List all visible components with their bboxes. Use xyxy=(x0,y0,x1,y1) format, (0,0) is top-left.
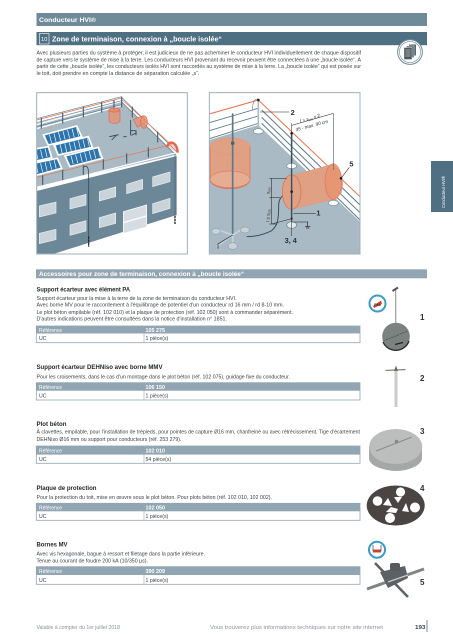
product: plot béton: DEHNiso Ø16 mm ou support pour conducteurs (réf. 253 279). xyxy=(36,437,182,443)
table: 102 050: 102 050 xyxy=(146,506,165,512)
icon: PA badge xyxy=(370,296,386,312)
table: 390 209: 390 209 xyxy=(146,569,165,575)
footer xyxy=(36,620,427,632)
intro text block: Avec plusieurs parties du système à protéger, il est judicieux de ne pas acheminer le conducteur HVI individuellement de chaque dispositif xyxy=(36,50,362,56)
table: 105 275: 1 pièce(s) xyxy=(146,336,169,342)
side tab xyxy=(431,161,453,212)
illustration: building roof overview xyxy=(33,93,187,254)
section heading: zone de terminaison: 10 xyxy=(41,37,47,43)
dimension labels: 35 - max. 90 cm xyxy=(295,119,329,132)
isolation zones xyxy=(109,108,178,153)
railings xyxy=(209,99,360,220)
table: 390 209 xyxy=(36,567,360,584)
product: plaque de protection: Pour la protection du toit, mise en œuvre sous le plot béton. Pour plots béton (réf. 102 010, 102 002). xyxy=(36,495,272,501)
product: plaque de protection xyxy=(36,485,360,520)
callout numbers: 1 xyxy=(316,208,320,217)
product: bornes MV: Bornes MV xyxy=(36,542,68,549)
callout numbers xyxy=(285,108,353,245)
right cylinder xyxy=(282,164,343,209)
table: 102 050: 1 pièce(s) xyxy=(146,514,169,520)
photo 4: protection plate xyxy=(367,486,425,526)
table: 102 010: 102 010 xyxy=(146,448,165,454)
intro text block: partir de cette „boucle isolée“, les conducteurs isolés HVI sont raccordés au système de mise à la terre. La „boucle isolée“ qui est posée sur xyxy=(36,64,361,70)
footer: Valable à compter du 1er juillet 2018 xyxy=(36,625,120,631)
dimension labels: s xyxy=(265,192,270,194)
dimension labels: x 2 xyxy=(312,113,321,120)
callout numbers: 2 xyxy=(291,108,295,117)
table: 106 150: 106 150 xyxy=(146,385,165,391)
table: 106 150: Référence xyxy=(39,385,62,391)
down conductors xyxy=(83,155,175,247)
table: 105 275: Référence xyxy=(39,328,62,334)
table: 102 050: UC xyxy=(39,514,47,520)
product: support écarteur avec élément PA: Le plot béton empilable (réf. 102 010) et la plaque de protection (réf. 102 050) sont à commander séparément. xyxy=(36,310,293,316)
accessories heading bar: Accessoires pour zone de terminaison, connexion à „boucle isolée“ xyxy=(39,271,244,278)
icon: PA badge: PAs xyxy=(374,303,381,307)
dimension labels xyxy=(265,113,329,222)
table: 390 209: Référence xyxy=(39,569,62,575)
footer: Vous trouverez plus informations techniques sur notre site internet xyxy=(210,625,384,631)
product: bornes MV: Avec vis hexagonale, bague à ressort et filetage dans la partie inférieure. xyxy=(36,552,205,558)
number 2: 2 xyxy=(420,374,425,383)
table: 106 150: UC xyxy=(39,393,47,399)
photo 2: support DEHNiso xyxy=(386,366,406,407)
right mast xyxy=(272,113,342,236)
product: support écarteur avec élément PA xyxy=(36,287,360,343)
dimension lines xyxy=(269,113,349,224)
product: bornes MV: Tenue au courant de foudre 200 kA (10/350 µs). xyxy=(36,559,148,565)
dimension labels: iso xyxy=(267,209,271,213)
product: support écarteur avec élément PA: Support écarteur pour la mise à la terre de la zone de terminaison du conducteur HVI. xyxy=(36,296,236,302)
callout numbers: 3, 4 xyxy=(285,236,298,245)
table: 102 010: 54 pièce(s) xyxy=(146,457,171,463)
number 5: 5 xyxy=(420,578,425,587)
orange loop and front poles xyxy=(37,145,170,185)
section heading: zone de terminaison: Zone de terminaison, connexion à „boucle isolée“ xyxy=(52,36,222,44)
section heading: zone de terminaison xyxy=(36,32,427,45)
table: 102 050 xyxy=(36,503,360,520)
dimension labels: iso xyxy=(267,187,271,192)
left cylinder xyxy=(210,138,250,189)
product: support écarteur avec élément PA: Avec borne MV pour le raccordement à l'équilibrage de potentiel d'un conducteur rd 16 mm / rd 8-10 mm. xyxy=(36,303,284,309)
solar panels xyxy=(33,126,102,176)
product: support écarteur DEHNiso: Support écarteur DEHNiso avec borne MMV xyxy=(36,364,163,371)
illustration: detail of isolated ring with dimensions xyxy=(209,93,360,254)
callout numbers: 5 xyxy=(349,159,353,168)
table: 102 010: Référence xyxy=(39,448,62,454)
table: 102 050: Référence xyxy=(39,506,62,512)
number 1: 1 xyxy=(420,313,425,322)
accessories heading bar xyxy=(36,269,427,278)
product: support écarteur DEHNiso: Pour les croisements, dans le cas d'un montage dans le plot béton (réf. 102 075), guidage fixe du conducteur. xyxy=(36,375,290,381)
windows xyxy=(39,172,170,244)
table: 106 150: 1 pièce(s) xyxy=(146,393,169,399)
table: 106 150 xyxy=(36,383,360,400)
product: plot béton: Plot béton xyxy=(36,421,66,428)
product: plaque de protection: Plaque de protection xyxy=(36,485,96,492)
product: support écarteur avec élément PA: Support écarteur avec élément PA xyxy=(36,287,130,294)
table: 105 275: UC xyxy=(39,336,47,342)
footer: 193 xyxy=(415,625,426,631)
intro text block: de capture vers le système de mise à la terre. Les conducteurs HVI provenant du recevoir peuvent être connectées à une „boucle isolée“. A xyxy=(36,57,361,63)
number 3: 3 xyxy=(420,427,425,436)
table: 390 209: 1 pièce(s) xyxy=(146,578,169,584)
intro text block: le toit, doit prendre en compte la distance de séparation calculée „s“. xyxy=(36,71,200,77)
product: bornes MV xyxy=(36,542,360,584)
facade xyxy=(37,156,177,254)
photo 3: concrete base xyxy=(369,429,422,471)
intro text block xyxy=(36,50,362,77)
table: 102 010: UC xyxy=(39,457,47,463)
chapter header bar xyxy=(36,13,427,26)
table: 105 275 xyxy=(36,326,360,343)
photo 1: support écarteur with PA element xyxy=(382,288,410,350)
dimension labels: iso xyxy=(308,117,314,122)
icon: documents xyxy=(398,40,422,64)
table: 390 209: UC xyxy=(39,578,47,584)
number 4: 4 xyxy=(420,484,425,493)
product: support écarteur avec élément PA: D'autres indications peuvent être consultées dans la notice d'installation n° 1851. xyxy=(36,317,227,323)
table: 105 275: 105 275 xyxy=(146,328,165,334)
icon: MV badge xyxy=(369,542,385,558)
product: support écarteur DEHNiso xyxy=(36,364,360,400)
product: plot béton: À clavettes, empilable, pour l'installation de trépieds, pour pointes de capture Ø16 mm, chanfreiné ou avec rétrécissement. Tige d'écartement xyxy=(36,429,361,436)
left mast and tripod xyxy=(212,113,342,249)
roof railing back xyxy=(37,97,177,156)
chapter header bar: Conducteur HVI® xyxy=(39,16,96,24)
dimension labels: l ≥ s xyxy=(265,213,270,222)
dimension labels: l = s xyxy=(299,116,309,124)
side tab: Conducteur HVI® xyxy=(441,175,446,208)
table: 102 010 xyxy=(36,446,360,463)
small mast on roof xyxy=(109,120,137,140)
photo 5: MV terminal clamp xyxy=(367,563,424,597)
product: plot béton xyxy=(36,421,361,463)
